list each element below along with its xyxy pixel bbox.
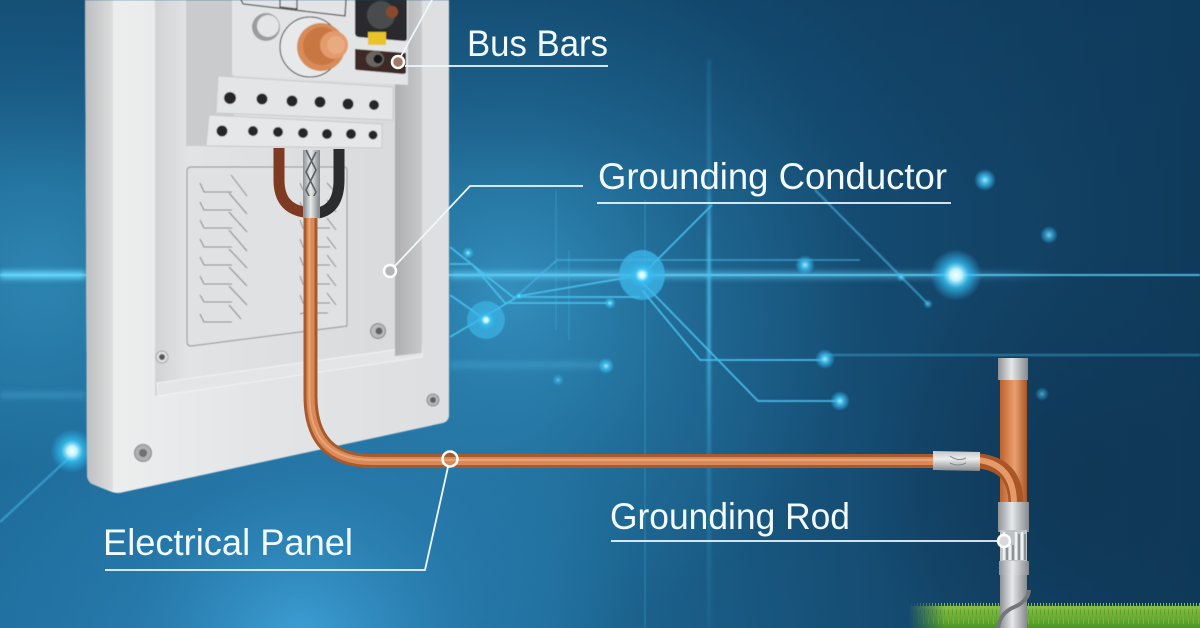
brown terminal xyxy=(355,49,406,74)
brown wire xyxy=(279,148,304,212)
label: Bus Bars xyxy=(392,0,608,68)
label: Grounding Rod: Grounding Rod xyxy=(610,496,850,537)
panel inner face xyxy=(155,0,422,396)
copper dial xyxy=(280,17,348,77)
panel left side wall xyxy=(85,0,113,491)
label: Bus Bars: Bus Bars xyxy=(467,23,608,64)
grass strip xyxy=(908,606,1200,628)
terminal strips xyxy=(206,76,393,148)
panel right recess xyxy=(395,0,422,356)
display outline xyxy=(241,0,346,16)
rod cap xyxy=(998,358,1028,380)
label: Electrical Panel: Electrical Panel xyxy=(103,522,353,563)
mesh clamp xyxy=(1000,530,1027,562)
breaker block shadow xyxy=(186,0,234,146)
label: Electrical Panel xyxy=(103,452,458,570)
bent connector xyxy=(978,461,1016,502)
vent cover with louvers xyxy=(187,167,347,346)
mounting screws xyxy=(134,324,439,462)
lower band xyxy=(999,561,1029,575)
braided sleeve on conductor xyxy=(303,150,320,218)
grounding conductor copper cable xyxy=(310,218,935,461)
cable clamp xyxy=(933,451,980,471)
glowing nodes xyxy=(50,169,1058,473)
black socket xyxy=(355,0,407,45)
label: Grounding Rod xyxy=(610,496,1010,547)
panel side and body xyxy=(85,0,449,493)
grounding rod assembly xyxy=(933,358,1029,628)
copper rod xyxy=(1000,380,1027,502)
electrical panel enclosure xyxy=(85,0,449,493)
label: Grounding Conductor: Grounding Conductor xyxy=(598,156,947,197)
upper sleeve xyxy=(998,502,1029,532)
black wire xyxy=(318,149,339,213)
panel wires xyxy=(279,148,339,213)
rod shaft xyxy=(1000,575,1027,628)
push button xyxy=(252,13,280,41)
label: Grounding Conductor xyxy=(384,156,951,277)
panel lower ledge xyxy=(157,346,422,396)
rod spiral xyxy=(998,590,1029,628)
breaker module xyxy=(232,0,408,85)
